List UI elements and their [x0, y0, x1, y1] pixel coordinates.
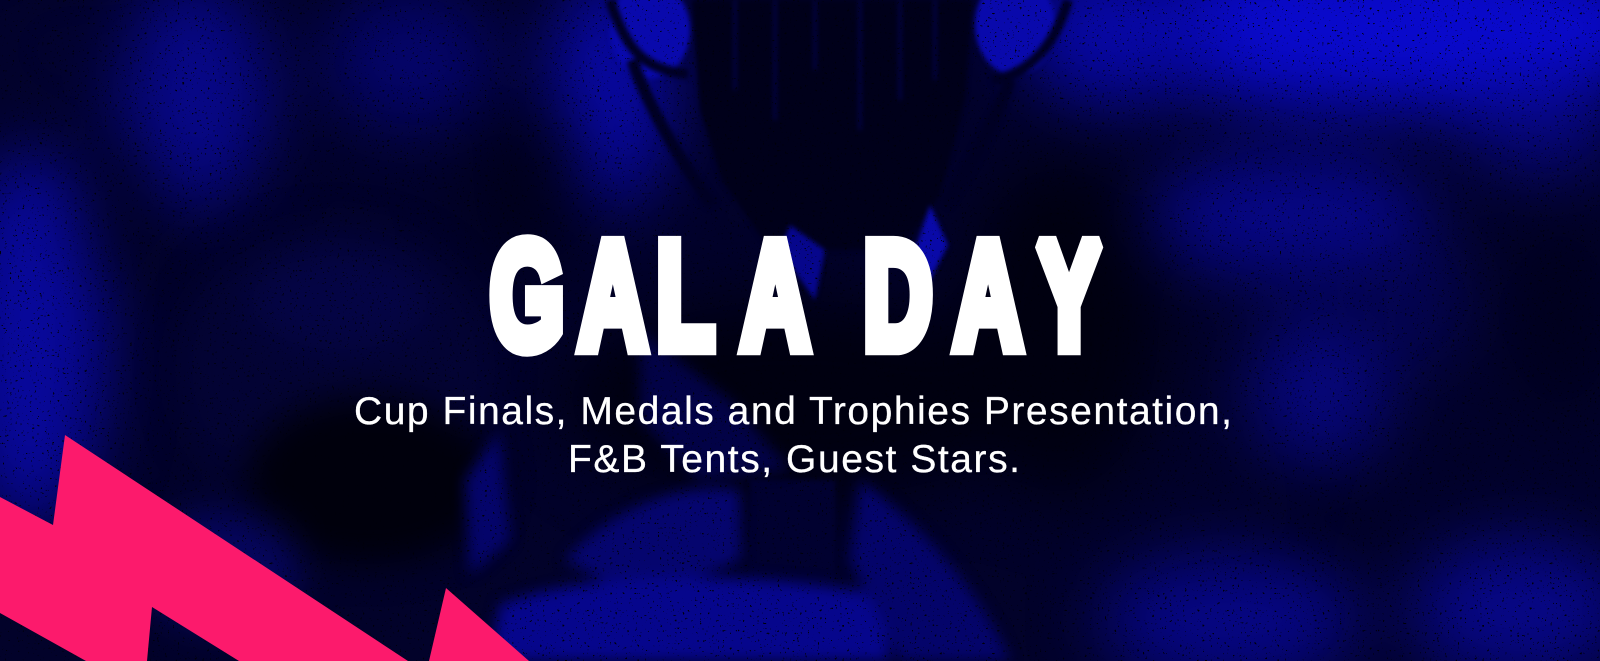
- subtitle: [354, 390, 1232, 481]
- subtitle: F&B Tents, Guest Stars.: [568, 438, 1020, 481]
- head silhouette: [140, 225, 495, 630]
- pink lightning graphic, lower left: [0, 435, 529, 661]
- title: GALA DAY: [490, 210, 1101, 380]
- subtitle: Cup Finals, Medals and Trophies Presentation,: [354, 390, 1232, 433]
- trophy and raised arms: [610, 0, 1068, 585]
